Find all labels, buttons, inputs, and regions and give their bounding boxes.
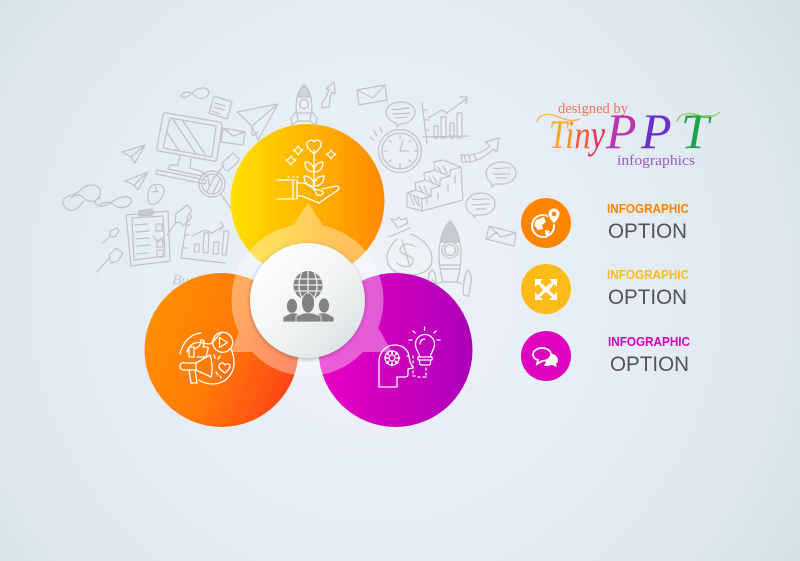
doodle: curved arrow top [322, 82, 335, 108]
icon: speech bubbles [521, 331, 571, 381]
circle: orange left [144, 273, 298, 427]
circle: magenta right [318, 273, 472, 427]
logo: designed by Tiny PPT infographics [537, 101, 720, 169]
option 2 [521, 264, 689, 314]
doodle: paper plane and envelope [221, 104, 278, 145]
doodle: rocket top [291, 85, 317, 125]
doodle: infinity top [181, 88, 209, 99]
translucent ring with three pointers [231, 203, 392, 376]
globe [294, 271, 322, 300]
logo line: infographics: infographics [617, 153, 695, 169]
doodle: paper planes [122, 145, 148, 190]
doodle: infinity chain [63, 185, 131, 210]
label: OPTION [608, 220, 687, 243]
icon: hand holding plant [277, 140, 339, 203]
label: OPTION [610, 353, 689, 376]
doodle: note [209, 96, 232, 119]
icon: people with globe [283, 271, 334, 322]
doodle: envelope lower right [486, 226, 516, 246]
doodle: speech bubble [386, 102, 415, 127]
logo swash right [677, 112, 720, 122]
icon: expand arrows [521, 264, 571, 314]
doodle: monitor [156, 113, 222, 185]
logo word: Tiny: Tiny [549, 112, 605, 157]
doodle: bar chart right [422, 97, 469, 144]
icon: megaphone marketing [180, 332, 234, 384]
doodles: business sketches behind the circles [63, 82, 516, 296]
circle: yellow top [230, 124, 384, 278]
option 1 [521, 198, 689, 248]
logo word: PPT: T [681, 103, 712, 159]
doodle: clock [370, 127, 422, 172]
doodle: rocket lower [428, 221, 471, 296]
heading: INFOGRAPHIC [608, 335, 690, 349]
option 3 [521, 331, 690, 381]
heading: INFOGRAPHIC [607, 202, 689, 216]
doodle: business word: Business [172, 272, 225, 292]
label: OPTION [608, 286, 687, 309]
logo word: PPT: P [605, 103, 637, 159]
logo word: PPT: P [640, 103, 672, 159]
doodle: mouse [148, 184, 164, 205]
doodle: curved arrow right [461, 138, 499, 162]
doodle: bar chart left [181, 215, 229, 263]
logo line: designed by: designed by [558, 101, 628, 117]
heading: INFOGRAPHIC [607, 268, 689, 282]
doodle: stairs [407, 160, 463, 211]
doodle: magnifier [199, 171, 236, 216]
logo swash [537, 114, 580, 122]
people [283, 293, 334, 322]
icon: globe with pin [521, 198, 571, 248]
icon: head with gear and light bulb [379, 327, 440, 387]
circle: centre white [250, 243, 365, 358]
doodle: envelope right [357, 85, 387, 105]
doodle: clipboard [126, 209, 170, 266]
doodle: money bag [387, 217, 432, 275]
doodle: pins [97, 153, 239, 272]
doodle: speech bubbles right [486, 162, 516, 187]
